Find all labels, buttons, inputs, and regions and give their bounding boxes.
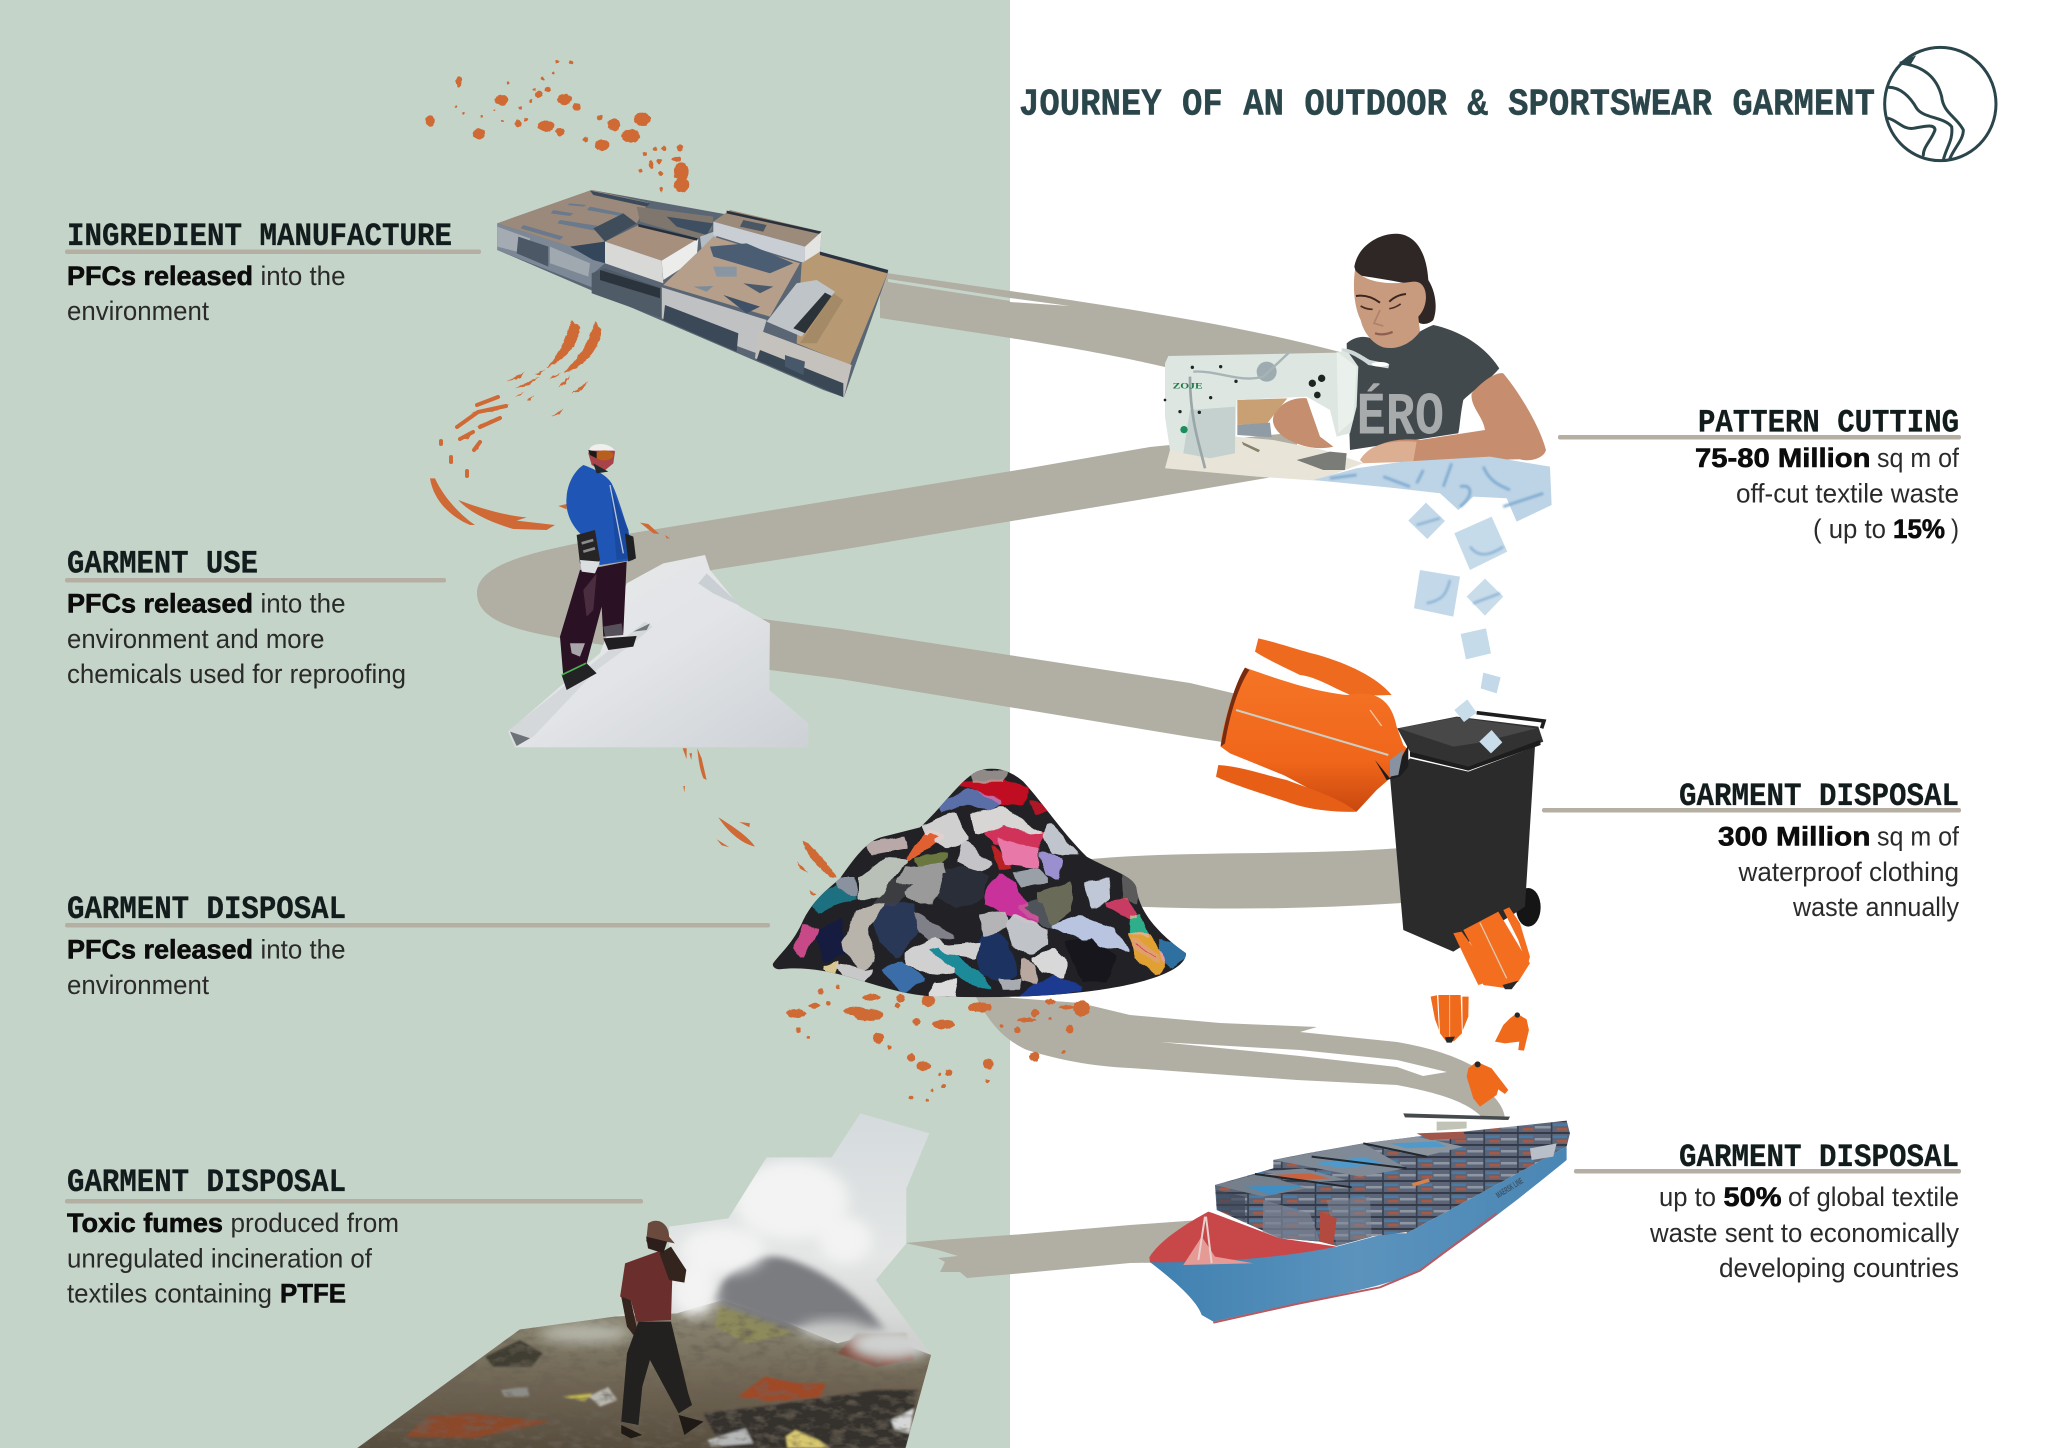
jacket 3 — [1431, 995, 1469, 1041]
boots — [603, 636, 637, 650]
heading: INGREDIENT MANUFACTURE — [67, 218, 452, 255]
text block: garment disposal, pile: into the — [260, 934, 346, 964]
text block: garment disposal, shipping: waste sent to economically — [1649, 1218, 1959, 1248]
text block: garment disposal, bin: 300 Million — [1718, 822, 1870, 852]
heading: GARMENT DISPOSAL — [67, 891, 346, 928]
text block: pattern cutting: off-cut textile waste — [1736, 478, 1959, 508]
text block: garment disposal, pile: environment — [67, 970, 209, 1000]
hull — [1149, 1147, 1567, 1322]
gloves — [577, 530, 600, 572]
heading: GARMENT USE — [67, 546, 258, 582]
smoke plume — [671, 1160, 872, 1317]
photo: incineration site with worker — [340, 1100, 940, 1448]
text block: pattern cutting: ( up to — [1813, 514, 1886, 544]
chemical brush strokes: left swirl — [441, 397, 506, 476]
text block: pattern cutting — [1558, 404, 1961, 544]
text block: ingredient manufacture: environment — [67, 296, 209, 326]
ribbon: factory to sewing machine — [880, 272, 1340, 372]
text block: garment disposal, toxic fumes: Toxic fumes — [67, 1208, 223, 1238]
ground and debris — [357, 1300, 931, 1448]
arms — [1363, 373, 1546, 462]
machine brand: ZOJE — [1173, 382, 1203, 391]
head and helmet — [588, 445, 615, 472]
chemical splatter: above factory — [426, 60, 689, 192]
hair and ponytail — [1354, 234, 1436, 324]
text block: garment disposal, shipping — [1574, 1139, 1961, 1283]
shirt — [1347, 325, 1499, 450]
ship name: MAERSK LINE — [1494, 1176, 1525, 1200]
ribbon: incineration site to ship — [905, 1220, 1200, 1278]
text block: ingredient manufacture: PFCs released — [67, 261, 253, 291]
ribbon: sewing machine around snowboarder to jacket — [477, 432, 1300, 744]
snow slope — [508, 555, 808, 747]
text block: garment disposal, shipping: 50% — [1724, 1182, 1782, 1212]
chemical brush strokes around snowboarder — [430, 431, 815, 851]
text block: garment use: PFCs released — [67, 588, 253, 618]
text block: garment disposal, bin: sq m of — [1877, 822, 1959, 852]
heading: PATTERN CUTTING — [1698, 404, 1959, 442]
presser foot — [1297, 452, 1347, 470]
snowboard — [509, 622, 653, 747]
text block: pattern cutting: 75-80 Million — [1695, 443, 1870, 473]
text block: garment disposal, toxic fumes: textiles containing — [67, 1278, 272, 1308]
falling orange jackets — [1431, 907, 1530, 1043]
text block: garment use — [65, 546, 446, 689]
clothing pile — [772, 768, 1186, 998]
falling fabric off-cuts — [1408, 503, 1507, 617]
text block: garment disposal, bin: waterproof clothing — [1738, 857, 1959, 887]
text block: garment disposal, pile: PFCs released — [67, 934, 253, 964]
patterned cloth — [1313, 457, 1552, 522]
panel: left green column — [0, 0, 1010, 1448]
ribbon slits — [888, 279, 1447, 1076]
shirt lettering: ÉRO — [1357, 383, 1444, 452]
wheel — [1516, 888, 1541, 927]
heading: GARMENT DISPOSAL — [67, 1164, 346, 1201]
text block: ingredient manufacture — [65, 218, 481, 326]
photo: snowboarder on snowy peak — [508, 444, 808, 747]
container stacks — [1407, 1121, 1570, 1233]
text block: ingredient manufacture: into the — [260, 261, 346, 291]
text block: pattern cutting: sq m of — [1877, 443, 1959, 473]
smouldering heap — [711, 1256, 887, 1333]
large orange jacket — [1216, 638, 1408, 812]
fabric pieces over lid — [1454, 699, 1502, 753]
bow deck — [1149, 1212, 1337, 1262]
ribbon: clothing pile to cargo ship — [975, 995, 1505, 1120]
small jackets over ship — [1467, 1012, 1529, 1107]
text block: garment disposal, shipping: up to — [1659, 1182, 1716, 1212]
text block: garment disposal, toxic fumes: unregulated incineration of — [67, 1244, 372, 1274]
chemical brush strokes between factory and snowboarder — [470, 320, 602, 427]
sewing machine — [1165, 350, 1358, 458]
lid — [1397, 717, 1543, 771]
title: JOURNEY OF AN OUTDOOR & SPORTSWEAR GARMENT — [1019, 84, 1875, 126]
text block: garment disposal, toxic fumes — [65, 1164, 643, 1308]
photo: ingredient manufacture factory — [497, 190, 888, 397]
journey ribbon linking every stage — [477, 272, 1505, 1278]
photo: woman at sewing machine — [1164, 234, 1552, 522]
ribbon: bin to clothing pile — [1080, 848, 1402, 909]
text block: garment use: into the — [260, 588, 346, 618]
text block: garment disposal, toxic fumes: PTFE — [280, 1278, 346, 1308]
jacket 2 — [1453, 907, 1530, 988]
worker — [620, 1221, 704, 1438]
blue jacket — [566, 465, 633, 565]
text block: garment disposal, bin: waste annually — [1792, 892, 1959, 922]
text block: garment disposal, bin — [1542, 778, 1961, 922]
trousers — [560, 562, 627, 677]
logo: hand-drawn globe mark — [1885, 47, 1996, 161]
wheelie bin — [1390, 713, 1544, 952]
hand — [1360, 441, 1417, 463]
heading: GARMENT DISPOSAL — [1679, 778, 1959, 815]
lamp — [1342, 348, 1389, 368]
text block: pattern cutting: ) — [1951, 514, 1959, 544]
text block: garment disposal, shipping: of global textile — [1788, 1182, 1959, 1212]
text block: pattern cutting: 15% — [1893, 514, 1945, 544]
bin body — [1390, 747, 1535, 952]
text block: garment disposal, pile — [65, 891, 770, 1000]
text block: garment use: chemicals used for reproofing — [67, 659, 406, 689]
falling fabric pieces near bin — [1461, 628, 1501, 693]
smoky sky — [340, 1100, 940, 1448]
chemical splatter below clothing pile — [786, 841, 1090, 1102]
table — [1165, 437, 1363, 481]
back cardboard box — [1237, 398, 1287, 425]
heading: GARMENT DISPOSAL — [1679, 1139, 1959, 1176]
text block: garment disposal, toxic fumes: produced from — [230, 1208, 399, 1238]
text block: garment disposal, shipping: developing countries — [1719, 1253, 1959, 1283]
face — [1354, 270, 1426, 348]
cargo ship — [1149, 1113, 1570, 1323]
text block: garment use: environment and more — [67, 624, 324, 654]
bridge deck — [1403, 1113, 1510, 1120]
